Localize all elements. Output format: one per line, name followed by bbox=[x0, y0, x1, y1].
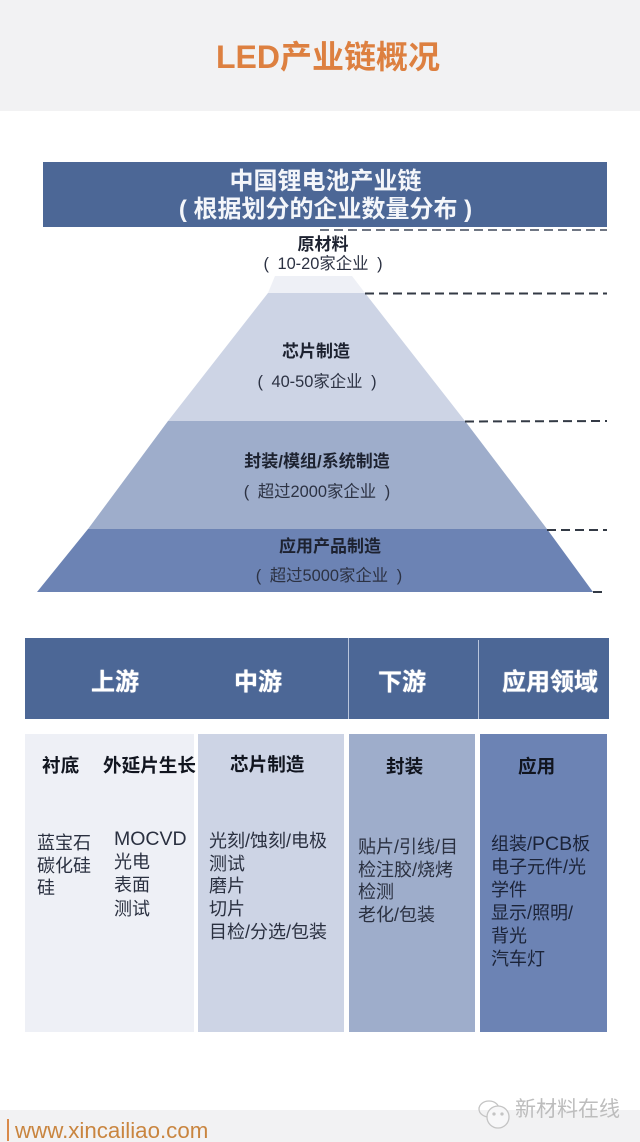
list: packaging steps: 贴片/引线/目 bbox=[358, 837, 458, 857]
tier label: raw materials: 原材料 bbox=[298, 235, 348, 254]
tier label: application products: 应用产品制造 bbox=[279, 537, 381, 556]
panel: midstream bbox=[198, 734, 344, 1032]
header divider bbox=[478, 640, 479, 719]
tier count: application products: ( 超过5000家企业 ) bbox=[256, 567, 402, 585]
list: application items: 学件 bbox=[491, 880, 527, 900]
tier 4: application products bbox=[37, 529, 593, 592]
tier count: packaging: ( 超过2000家企业 ) bbox=[244, 483, 390, 501]
tier 3: packaging bbox=[88, 421, 547, 529]
list: epitaxy steps: MOCVD bbox=[114, 828, 187, 850]
list: substrate materials: 硅 bbox=[37, 878, 55, 898]
stage header bar bbox=[25, 638, 609, 719]
list: chip steps: 测试 bbox=[209, 854, 245, 874]
list: application items: 组装/PCB板 bbox=[491, 833, 590, 855]
list: chip steps: 切片 bbox=[209, 899, 245, 919]
list: substrate materials: 蓝宝石 bbox=[37, 833, 91, 853]
dashed level lines bbox=[320, 230, 607, 592]
subheading: chip manufacturing: 芯片制造 bbox=[230, 754, 304, 775]
list: packaging steps bbox=[358, 837, 458, 925]
stage: downstream: 下游 bbox=[378, 669, 426, 696]
stage: midstream: 中游 bbox=[234, 669, 282, 696]
list: substrate materials bbox=[37, 833, 91, 898]
header divider bbox=[348, 638, 349, 719]
title: LED产业链概况 bbox=[216, 39, 440, 75]
watermark text: 新材料在线 bbox=[515, 1098, 620, 1121]
list: chip steps: 光刻/蚀刻/电极 bbox=[209, 831, 327, 851]
tier count: raw materials: ( 10-20家企业 ) bbox=[263, 255, 383, 273]
icon: chat bubbles bbox=[478, 1100, 510, 1129]
list: epitaxy steps: 光电 bbox=[114, 852, 150, 872]
list: packaging steps: 老化/包装 bbox=[358, 905, 435, 925]
tier count: chip manufacturing: ( 40-50家企业 ) bbox=[257, 373, 377, 391]
list: packaging steps: 检测 bbox=[358, 882, 394, 902]
panel: downstream bbox=[349, 734, 475, 1032]
list: application items: 汽车灯 bbox=[491, 949, 545, 969]
stage: upstream: 上游 bbox=[91, 669, 139, 696]
tier 1: raw materials bbox=[268, 276, 365, 293]
stage: applications: 应用领域 bbox=[502, 669, 598, 696]
list: application items: 电子元件/光 bbox=[491, 857, 586, 877]
chart heading text bbox=[179, 168, 472, 223]
list: application items bbox=[491, 833, 590, 969]
watermark bbox=[478, 1098, 620, 1129]
chart heading text: 中国锂电池产业链 bbox=[230, 168, 422, 195]
list: packaging steps: 检注胶/烧烤 bbox=[358, 860, 453, 880]
tier label: packaging: 封装/模组/系统制造 bbox=[244, 452, 390, 471]
list: chip steps: 目检/分选/包装 bbox=[209, 922, 327, 942]
footer band bbox=[0, 1110, 640, 1142]
list: epitaxy steps: 表面 bbox=[114, 875, 150, 895]
list: chip steps bbox=[209, 831, 327, 942]
subheading: epitaxy: 外延片生长 bbox=[103, 755, 196, 776]
panel: applications bbox=[480, 734, 607, 1032]
tier 2: chip manufacturing bbox=[168, 293, 465, 421]
list: application items: 背光 bbox=[491, 926, 527, 946]
list: epitaxy steps: 测试 bbox=[114, 899, 150, 919]
list: epitaxy steps bbox=[114, 828, 187, 919]
list: substrate materials: 碳化硅 bbox=[37, 856, 91, 876]
list: chip steps: 磨片 bbox=[209, 876, 245, 896]
tier label: chip manufacturing: 芯片制造 bbox=[282, 342, 350, 361]
subheading: substrate: 衬底 bbox=[42, 755, 79, 776]
chart header banner bbox=[43, 162, 607, 227]
pyramid chart bbox=[37, 229, 607, 593]
chart heading text: ( 根据划分的企业数量分布 ) bbox=[179, 196, 472, 223]
subheading: application: 应用 bbox=[518, 756, 555, 777]
subheading: packaging: 封装 bbox=[386, 756, 423, 777]
panel: upstream bbox=[25, 734, 194, 1032]
list: application items: 显示/照明/ bbox=[491, 903, 573, 923]
top title band bbox=[0, 0, 640, 111]
